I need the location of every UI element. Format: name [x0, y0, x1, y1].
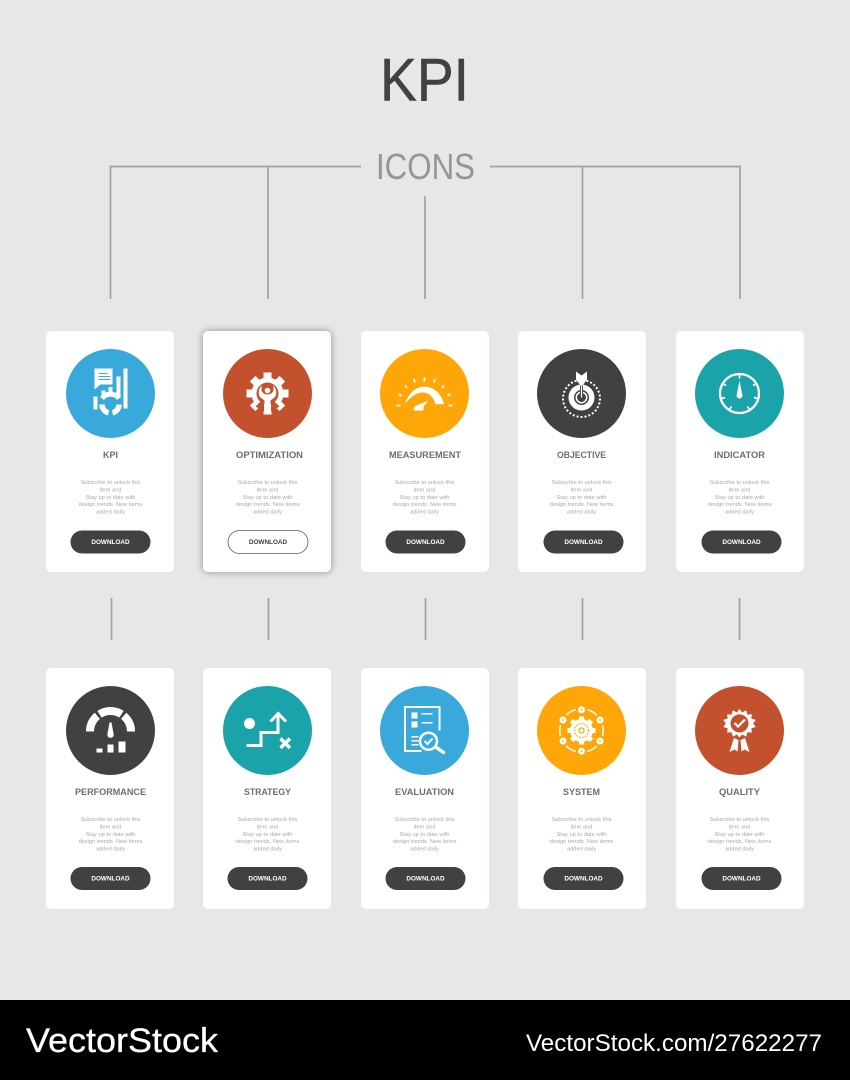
text block: added daily: [725, 846, 754, 852]
panel: QUALITY: [676, 668, 804, 909]
heading: MEASUREMENT: [389, 449, 461, 460]
text block: [236, 480, 300, 516]
text block: [79, 480, 143, 516]
text block: [236, 817, 300, 852]
text block: Stay up to date with: [557, 832, 606, 838]
top connector lines: [110, 166, 740, 299]
text block: added daily: [96, 846, 125, 852]
heading: OPTIMIZATION: [236, 449, 303, 460]
text block: design trends. New items: [393, 839, 457, 845]
button: DOWNLOAD: [406, 876, 445, 882]
icon: performance gauge with bars: [66, 686, 155, 775]
text block: Stay up to date with: [715, 495, 764, 501]
text block: [79, 817, 143, 852]
text block: item and: [414, 488, 435, 494]
button: DOWNLOAD: [722, 876, 761, 882]
panel: OPTIMIZATION (highlighted): [203, 331, 331, 572]
text block: design trends. New items: [236, 839, 300, 845]
button: DOWNLOAD: [564, 876, 603, 882]
text block: [708, 817, 772, 852]
text block: item and: [257, 488, 278, 494]
button: DOWNLOAD: [248, 876, 287, 882]
button: [70, 530, 150, 554]
text block: [550, 480, 614, 516]
text block: Subscribe to unlock this: [394, 817, 455, 823]
button: [228, 530, 308, 554]
text block: [393, 817, 457, 852]
panel: EVALUATION: [361, 668, 489, 909]
heading: PERFORMANCE: [75, 786, 146, 797]
heading: KPI: [103, 449, 118, 460]
text block: item and: [729, 488, 750, 494]
footer bar: [0, 1000, 850, 1080]
button: [544, 867, 624, 890]
text block: Stay up to date with: [715, 832, 764, 838]
button: [702, 530, 782, 554]
text block: Subscribe to unlock this: [551, 480, 612, 486]
text block: added daily: [410, 510, 439, 516]
button: [386, 530, 466, 554]
text block: Subscribe to unlock this: [80, 480, 141, 486]
text block: design trends. New items: [550, 839, 614, 845]
button: DOWNLOAD: [91, 539, 130, 546]
text block: design trends. New items: [708, 502, 772, 508]
text block: Stay up to date with: [400, 495, 449, 501]
text block: Stay up to date with: [243, 832, 292, 838]
heading: QUALITY: [719, 786, 761, 797]
icon: gear network: [537, 686, 626, 775]
panel: OBJECTIVE: [518, 331, 646, 572]
icon: award rosette: [695, 686, 784, 775]
subtitle: ICONS: [376, 146, 475, 187]
text block: Subscribe to unlock this: [551, 817, 612, 823]
button: [228, 867, 308, 890]
heading: INDICATOR: [714, 449, 765, 460]
icon: target with arrow: [537, 349, 626, 438]
button: DOWNLOAD: [564, 539, 603, 546]
text block: item and: [257, 824, 278, 830]
text block: Stay up to date with: [557, 495, 606, 501]
text block: added daily: [253, 846, 282, 852]
text block: Subscribe to unlock this: [709, 817, 770, 823]
text block: added daily: [725, 510, 754, 516]
text block: item and: [100, 824, 121, 830]
text block: added daily: [96, 510, 125, 516]
text block: item and: [100, 488, 121, 494]
title: KPI: [380, 46, 469, 114]
heading: OBJECTIVE: [557, 449, 606, 460]
button: DOWNLOAD: [91, 876, 130, 882]
button: DOWNLOAD: [249, 539, 288, 546]
button: [386, 867, 466, 890]
middle connector lines: [112, 598, 740, 640]
text block: Subscribe to unlock this: [394, 480, 455, 486]
text block: [708, 480, 772, 516]
icon: checklist with magnifier: [380, 686, 469, 775]
panel: MEASUREMENT: [361, 331, 489, 572]
text block: Subscribe to unlock this: [709, 480, 770, 486]
text block: [393, 480, 457, 516]
icon: gear with wrench: [223, 349, 312, 438]
text block: design trends. New items: [550, 502, 614, 508]
text block: Subscribe to unlock this: [237, 817, 298, 823]
panel: SYSTEM: [518, 668, 646, 909]
panel: STRATEGY: [203, 668, 331, 909]
heading: STRATEGY: [244, 786, 292, 797]
text block: Stay up to date with: [243, 495, 292, 501]
button: [70, 867, 150, 890]
text block: item and: [729, 824, 750, 830]
text block: design trends. New items: [393, 502, 457, 508]
text block: item and: [571, 824, 592, 830]
icon: KPI report chart: [66, 349, 155, 438]
text block: Subscribe to unlock this: [237, 480, 298, 486]
text block: Stay up to date with: [400, 832, 449, 838]
text block: added daily: [567, 510, 596, 516]
button: [544, 530, 624, 554]
text block: added daily: [253, 510, 282, 516]
text block: Stay up to date with: [86, 495, 135, 501]
text block: Subscribe to unlock this: [80, 817, 141, 823]
text block: design trends. New items: [79, 839, 143, 845]
text block: added daily: [410, 846, 439, 852]
icon: stairs with arrow: [223, 686, 312, 775]
button: [702, 867, 782, 890]
button: DOWNLOAD: [406, 539, 445, 546]
text block: added daily: [567, 846, 596, 852]
panel: PERFORMANCE: [46, 668, 174, 909]
footer logo: VectorStock: [26, 1022, 219, 1060]
heading: EVALUATION: [395, 786, 454, 797]
footer url: VectorStock.com/27622277: [526, 1030, 822, 1057]
text block: [550, 817, 614, 852]
panel: KPI: [46, 331, 174, 572]
text block: design trends. New items: [236, 502, 300, 508]
text block: item and: [414, 824, 435, 830]
text block: Stay up to date with: [86, 832, 135, 838]
icon: gauge dial: [695, 349, 784, 438]
text block: design trends. New items: [79, 502, 143, 508]
text block: item and: [571, 488, 592, 494]
heading: SYSTEM: [563, 786, 600, 797]
panel: INDICATOR: [676, 331, 804, 572]
icon: speedometer: [380, 349, 469, 438]
text block: design trends. New items: [708, 839, 772, 845]
button: DOWNLOAD: [722, 539, 761, 546]
